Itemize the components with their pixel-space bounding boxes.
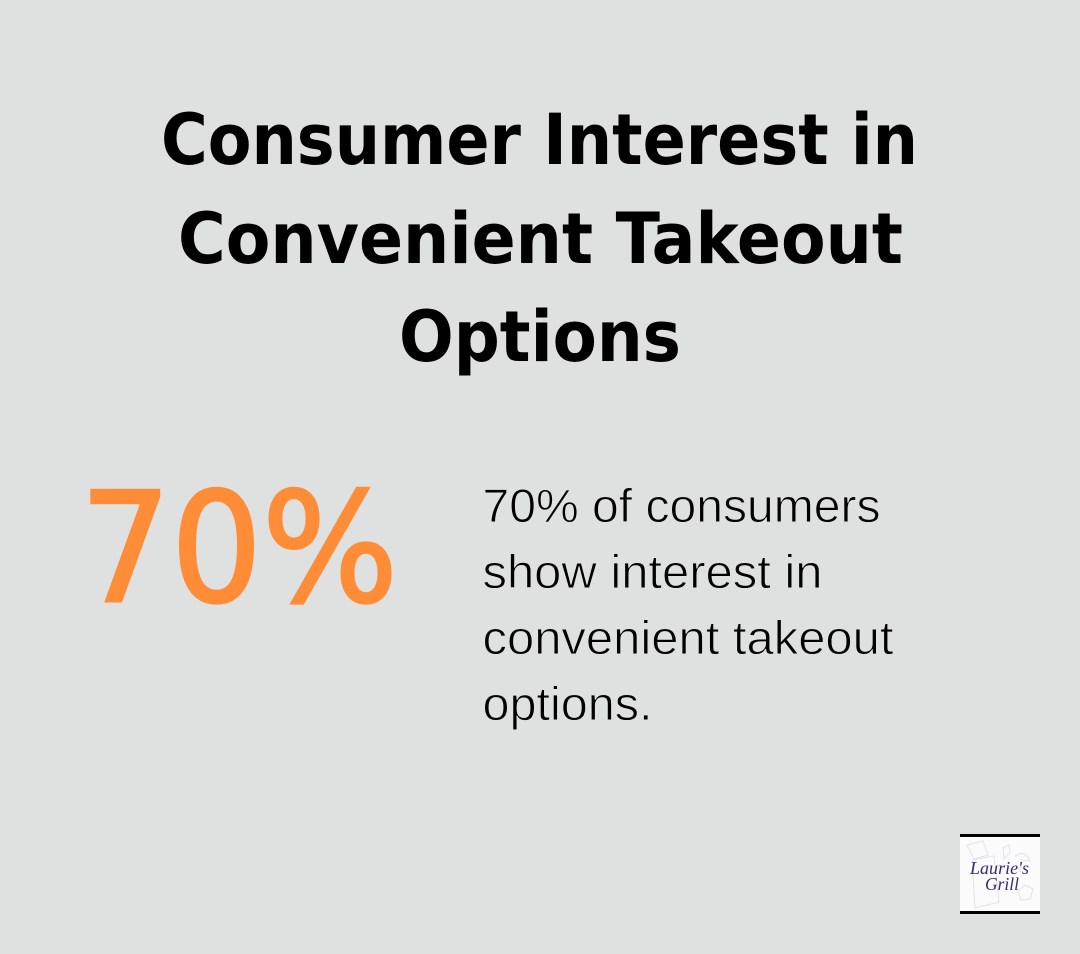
logo: Laurie's Grill <box>960 834 1040 914</box>
description text: convenient takeout <box>482 611 894 664</box>
description text: options. <box>482 677 652 730</box>
logo: Laurie's Grill: Laurie's <box>969 858 1029 878</box>
description text: 70% of consumers <box>482 479 880 532</box>
logo: Laurie's Grill: Grill <box>985 874 1019 894</box>
description text <box>482 479 894 730</box>
title <box>161 99 918 378</box>
description text: show interest in <box>482 545 822 598</box>
title: Consumer Interest in <box>161 99 918 181</box>
title: Convenient Takeout <box>178 198 903 280</box>
big statistic: 70%: 70% <box>80 460 398 637</box>
title: Options <box>399 296 681 378</box>
